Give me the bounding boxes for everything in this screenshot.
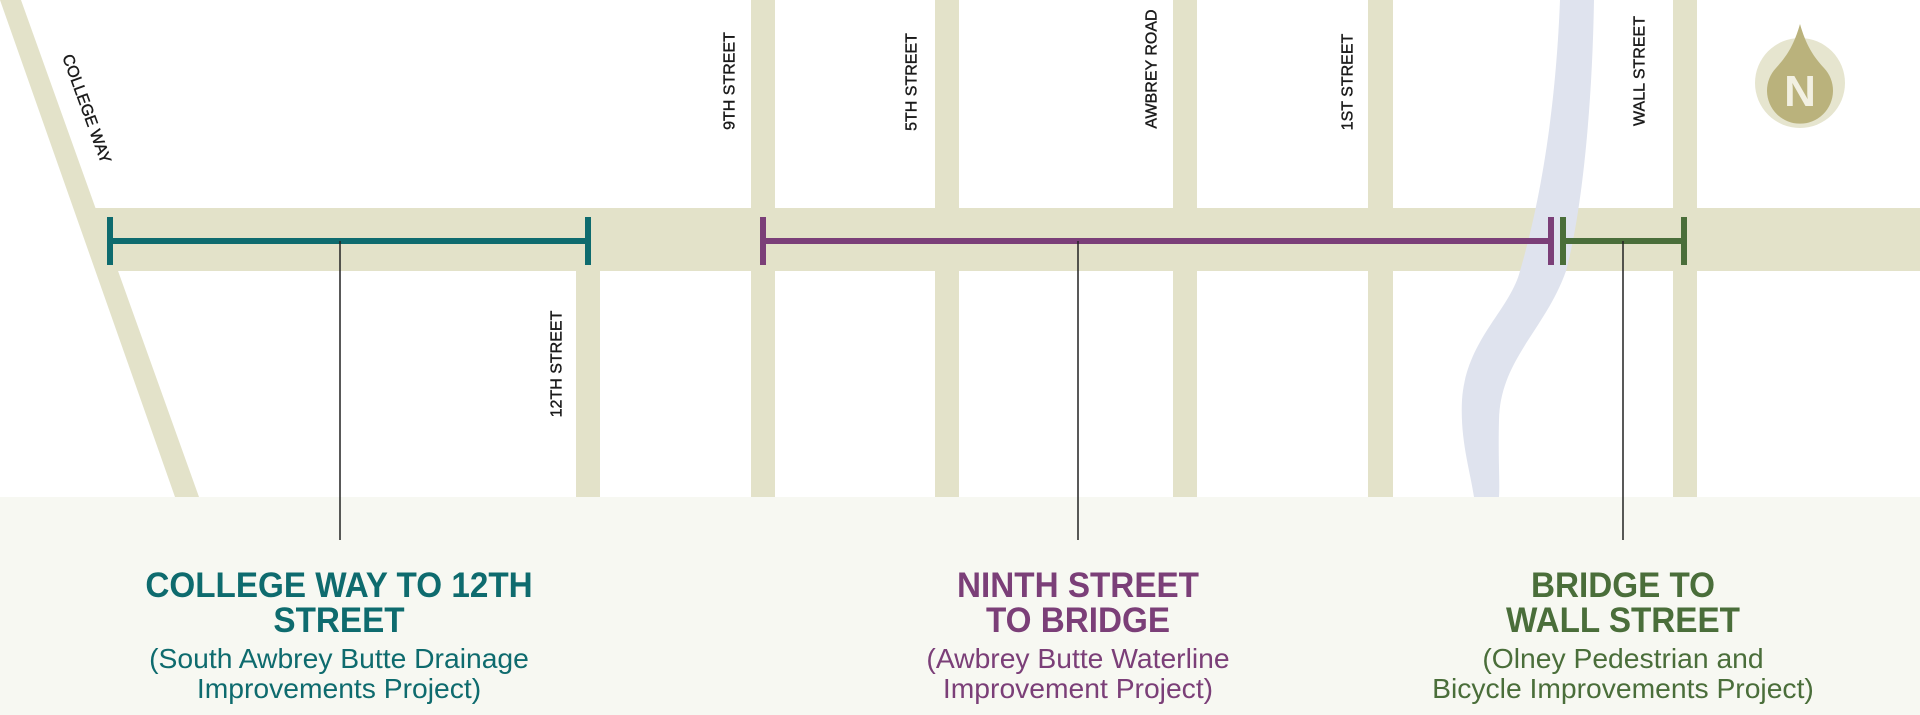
segment: green: [1563, 217, 1684, 265]
label: bridge to wall street: (Olney Pedestrian and: [1482, 643, 1764, 674]
label: ninth street to bridge: [926, 566, 1230, 704]
street labels: AWBREY ROAD: [1144, 9, 1160, 129]
compass: [1755, 24, 1845, 128]
street labels: 1ST STREET: [1340, 33, 1356, 130]
street labels: 5TH STREET: [904, 33, 920, 131]
label: bridge to wall street: BRIDGE TO: [1531, 566, 1715, 605]
label: ninth street to bridge: Improvement Project): [943, 673, 1213, 704]
label: ninth street to bridge: (Awbrey Butte Waterline: [926, 643, 1230, 674]
street labels: [58, 9, 1649, 417]
label: college way to 12th: COLLEGE WAY TO 12TH: [145, 566, 533, 605]
bottom panel: [0, 497, 1920, 715]
label: college way to 12th: Improvements Project): [197, 673, 481, 704]
street labels: WALL STREET: [1632, 16, 1648, 126]
street labels: COLLEGE WAY: [58, 52, 114, 166]
label: college way to 12th: (South Awbrey Butte Drainage: [149, 643, 529, 674]
label: college way to 12th: [145, 566, 533, 704]
street labels: 12TH STREET: [548, 310, 566, 417]
label: bridge to wall street: [1432, 566, 1814, 704]
label: bridge to wall street: Bicycle Improvements Project): [1432, 673, 1814, 704]
callout lines: [340, 241, 1623, 540]
label: ninth street to bridge: TO BRIDGE: [986, 601, 1170, 640]
map: streets: [0, 0, 1920, 497]
segment: teal: [110, 217, 588, 265]
compass: N: [1784, 67, 1816, 116]
label: college way to 12th: STREET: [273, 601, 405, 640]
river: [1462, 0, 1594, 497]
label: bridge to wall street: WALL STREET: [1506, 601, 1740, 640]
street labels: 9TH STREET: [722, 32, 738, 130]
label: ninth street to bridge: NINTH STREET: [957, 566, 1199, 605]
segment: purple: [763, 217, 1551, 265]
